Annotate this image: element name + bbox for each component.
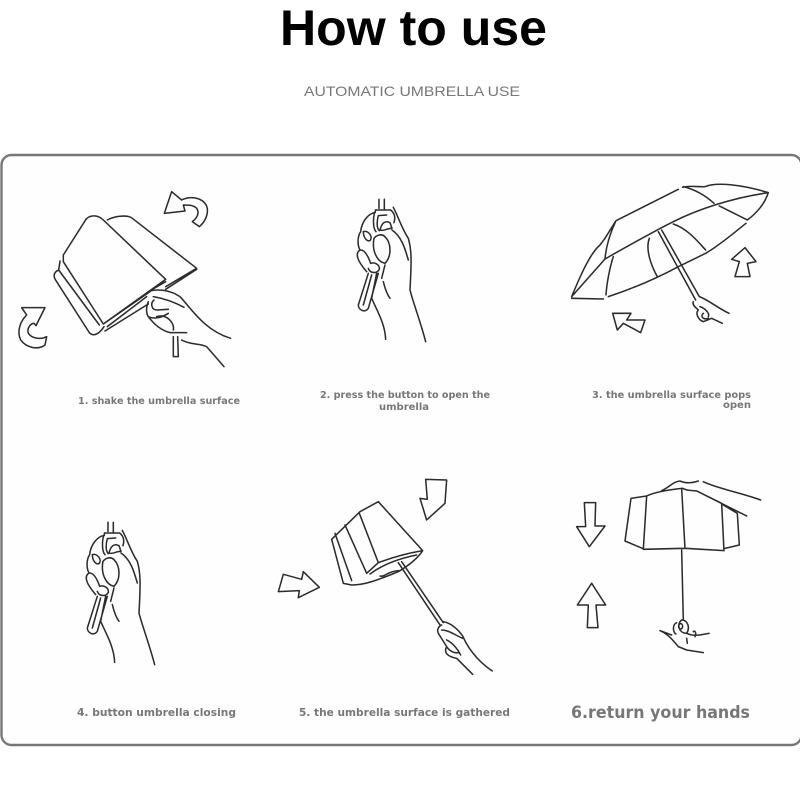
caption 3: open bbox=[723, 400, 751, 411]
canopy bbox=[625, 481, 761, 551]
icon: curved arrow left bbox=[19, 308, 47, 348]
caption 2 bbox=[320, 390, 490, 413]
icon: arrow left bbox=[613, 313, 645, 333]
shaft and hand bbox=[658, 230, 729, 323]
icon: curved arrow top bbox=[164, 192, 207, 227]
icon: arrow down bbox=[577, 503, 605, 547]
caption 4: 4. button umbrella closing bbox=[77, 706, 236, 719]
hand gripping handle bbox=[147, 290, 231, 367]
shaft and hand bbox=[398, 562, 492, 674]
panel: instructions frame bbox=[2, 155, 800, 745]
caption 6: 6.return your hands bbox=[571, 703, 750, 722]
caption 3 bbox=[592, 390, 751, 411]
title: How to use bbox=[280, 0, 547, 56]
step 2 illustration: hand pressing button bbox=[357, 199, 426, 342]
step 5 illustration: gathering the canopy bbox=[278, 479, 492, 674]
step 6 illustration: closed canopy returned to the hand bbox=[577, 481, 761, 653]
gathered canopy bbox=[332, 502, 423, 585]
icon: arrow down bbox=[420, 479, 447, 520]
step 3 illustration: umbrella pops open bbox=[572, 184, 768, 333]
caption 3: 3. the umbrella surface pops bbox=[592, 390, 751, 401]
caption 5: 5. the umbrella surface is gathered bbox=[299, 706, 510, 719]
caption 2: umbrella bbox=[379, 402, 429, 413]
icon: arrow right bbox=[278, 572, 319, 598]
icon: arrow up bbox=[732, 248, 756, 277]
folded umbrella canopy bbox=[54, 216, 197, 335]
subtitle: AUTOMATIC UMBRELLA USE bbox=[304, 83, 520, 99]
caption 2: 2. press the button to open the bbox=[320, 390, 490, 401]
step 4 illustration: hand pressing button to close bbox=[86, 522, 155, 665]
icon: arrow up bbox=[577, 583, 606, 628]
step 1 illustration: shaking the umbrella bbox=[19, 192, 231, 367]
caption 1: 1. shake the umbrella surface bbox=[78, 396, 240, 407]
shaft and open hand bbox=[660, 550, 709, 653]
open canopy bbox=[572, 184, 768, 299]
